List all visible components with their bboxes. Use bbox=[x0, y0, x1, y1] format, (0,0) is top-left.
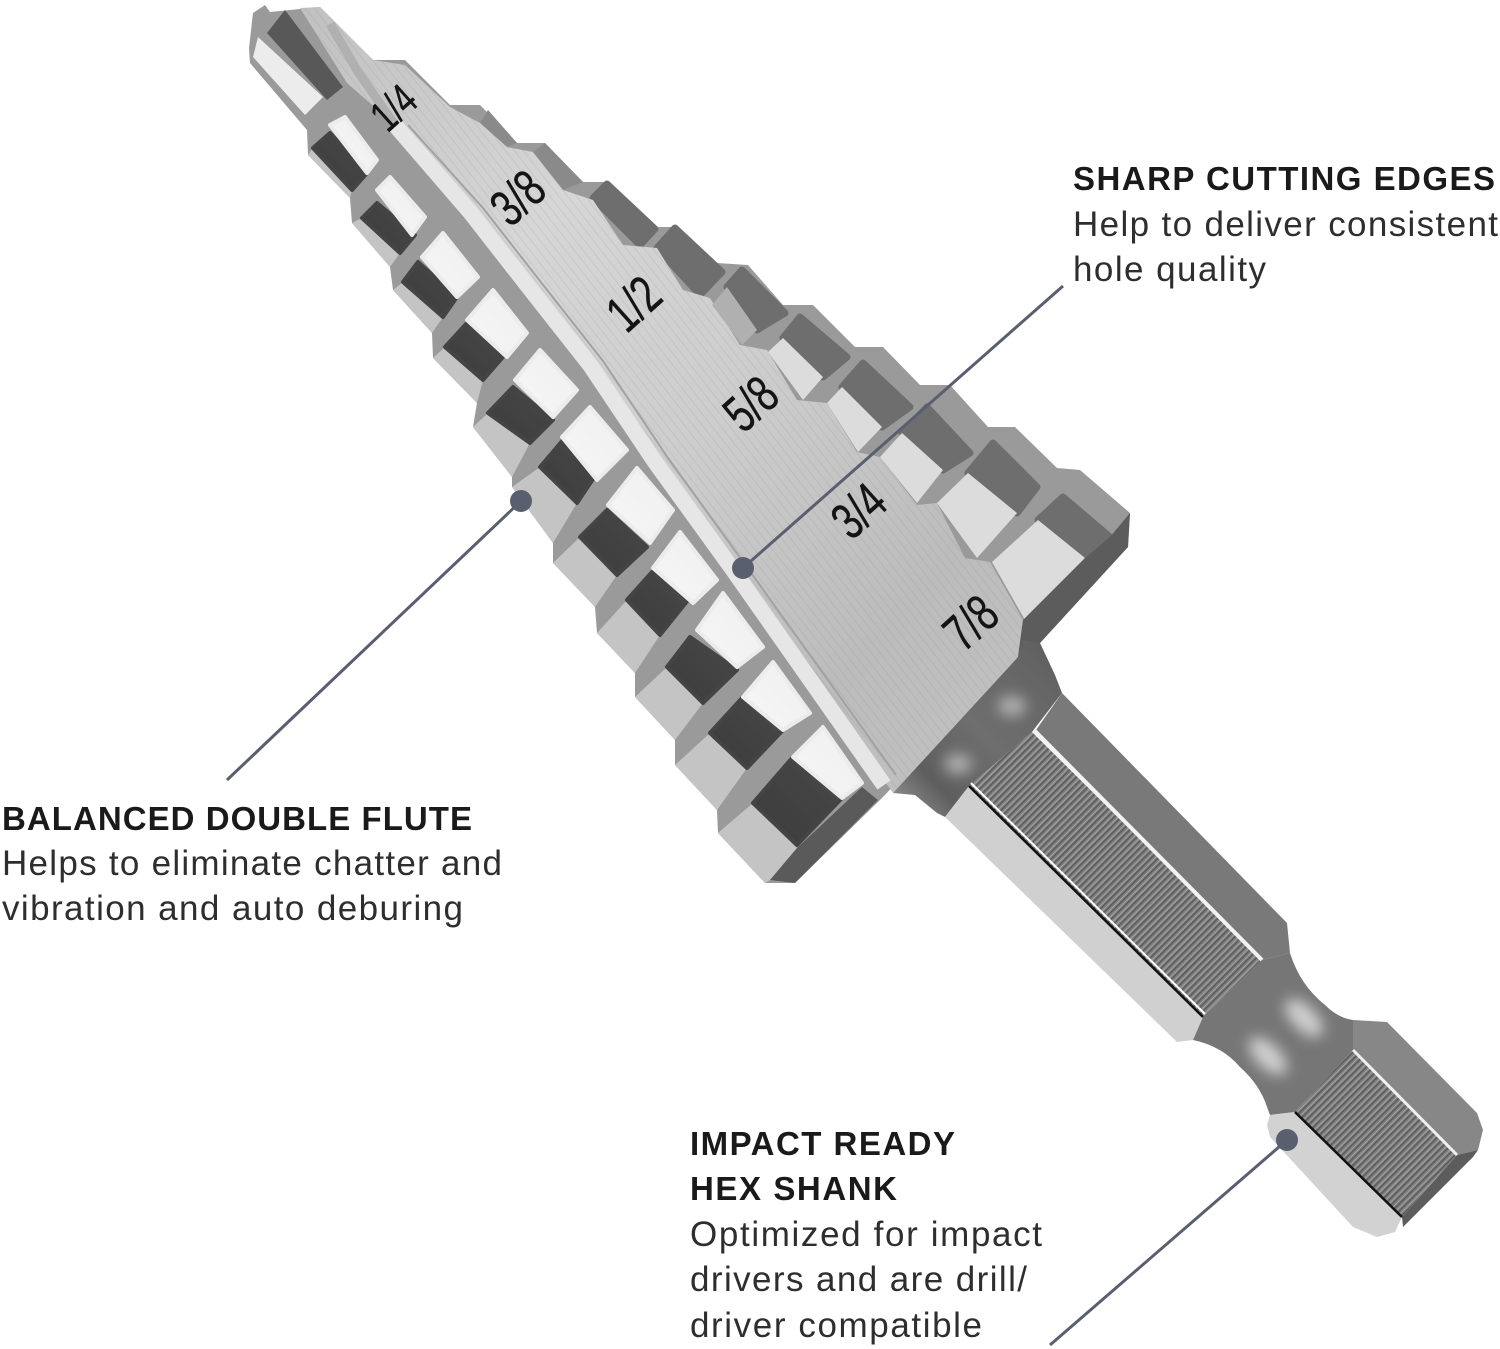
step lands bbox=[308, 148, 797, 883]
bright right pockets bbox=[768, 338, 1085, 620]
text block: sharp cutting edges bbox=[1073, 160, 1498, 289]
pilot ridge bbox=[330, 24, 395, 125]
drill bit illustration bbox=[249, 5, 1483, 1237]
lower relief facet bbox=[770, 787, 878, 883]
cutter silhouette bbox=[249, 5, 1130, 883]
hex end light face bbox=[1267, 1112, 1402, 1237]
size markings: 3/8 bbox=[479, 159, 557, 237]
face brushing texture bbox=[300, 7, 1023, 793]
bright flute pockets bbox=[330, 117, 862, 798]
flute ridge bbox=[395, 125, 884, 785]
collar highlights bbox=[944, 696, 1026, 774]
size markings: 7/8 bbox=[932, 584, 1010, 662]
text block: impact ready hex shank: driver compatible bbox=[690, 1306, 982, 1345]
collar bbox=[893, 640, 1062, 817]
dark pilot tip flute bbox=[267, 10, 343, 100]
shank upper face bbox=[1036, 693, 1290, 960]
neck highlights bbox=[1243, 993, 1329, 1081]
text block: impact ready hex shank: drivers and are drill/ bbox=[690, 1260, 1027, 1299]
bright pilot tip facet bbox=[253, 37, 323, 115]
text block: impact ready hex shank: IMPACT READY bbox=[690, 1125, 955, 1162]
hex end shadow tip bbox=[1402, 1150, 1478, 1227]
size markings: 1/4 bbox=[361, 75, 427, 141]
hex end knurled face bbox=[1295, 1050, 1457, 1217]
text block: balanced double flute: vibration and auto deburing bbox=[2, 889, 463, 928]
text block: sharp cutting edges: Help to deliver consistent bbox=[1073, 205, 1498, 244]
size markings: 3/4 bbox=[820, 472, 898, 550]
text block: balanced double flute: BALANCED DOUBLE FLUTE bbox=[2, 800, 472, 837]
shank light face bbox=[945, 786, 1203, 1042]
text block: balanced double flute bbox=[2, 800, 502, 928]
shank neck bbox=[1193, 953, 1353, 1115]
rear cut plane bbox=[1018, 513, 1130, 657]
shank knurled face bbox=[969, 732, 1262, 1017]
callout: balanced double flute pointer bbox=[227, 490, 532, 780]
upper step rolls bbox=[480, 110, 583, 190]
size markings bbox=[361, 75, 1010, 662]
text block: impact ready hex shank bbox=[690, 1125, 1042, 1345]
right step rolls bbox=[593, 184, 1110, 558]
text block: impact ready hex shank: Optimized for impact bbox=[690, 1215, 1042, 1254]
text block: sharp cutting edges: hole quality bbox=[1073, 250, 1266, 289]
hex end upper face bbox=[1353, 1020, 1483, 1155]
right pocket windows bbox=[712, 287, 757, 345]
callout: hex shank pointer bbox=[1050, 1129, 1298, 1345]
callout: sharp cutting edges pointer bbox=[732, 286, 1063, 579]
dark flute pockets bbox=[313, 133, 842, 845]
text block: impact ready hex shank: HEX SHANK bbox=[690, 1170, 897, 1207]
text block: balanced double flute: Helps to eliminate chatter and bbox=[2, 844, 502, 883]
size markings: 5/8 bbox=[712, 365, 790, 443]
hex end edge lines bbox=[1295, 1050, 1457, 1217]
text block: sharp cutting edges: SHARP CUTTING EDGES bbox=[1073, 160, 1495, 197]
shank edge highlights bbox=[969, 730, 1262, 1017]
ridge shadow line bbox=[408, 125, 896, 775]
main marked face bbox=[300, 7, 1023, 793]
size markings: 1/2 bbox=[595, 265, 673, 343]
